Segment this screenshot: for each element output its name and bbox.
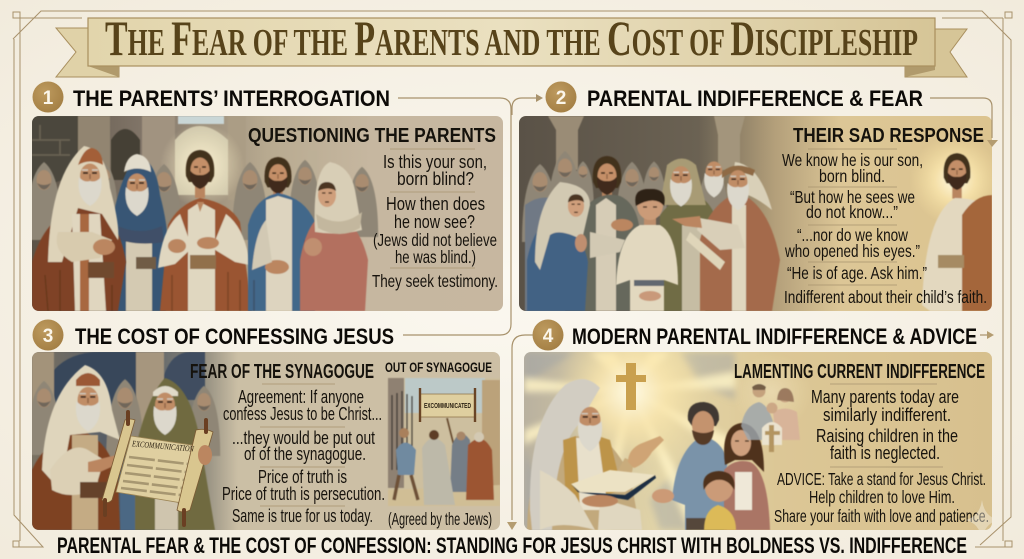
- panel 1 text: Is this your son,: [383, 151, 487, 172]
- panel 2 text: “...nor do we know: [797, 225, 908, 245]
- heading text: PARENTAL INDIFFERENCE & FEAR: [587, 86, 923, 111]
- figure: second elder: [120, 378, 215, 530]
- panel 4 text: faith is neglected.: [830, 442, 940, 463]
- badge 4: [532, 320, 564, 350]
- figure: father: [248, 157, 315, 311]
- panel 4 text: Raising children in the: [816, 425, 958, 446]
- figure: elder in white and brown: [32, 146, 126, 311]
- excommunicated banner: EXCOMMUNICATED: [424, 403, 471, 410]
- panel 1 text: he now see?: [394, 211, 475, 232]
- panel 3: fear of the synagogue: [27, 352, 500, 530]
- left ribbon tail: [56, 28, 119, 77]
- panel 3 text: ...they would be put out: [232, 427, 375, 448]
- figure: mother: [527, 182, 590, 311]
- badge 1: 1: [43, 88, 54, 109]
- panel 2 text: do not know...”: [806, 202, 898, 222]
- figure: father: [582, 156, 640, 311]
- panel 1 text: he was blind.): [395, 247, 476, 267]
- background crowd: [26, 160, 378, 242]
- panel 3 text: Price of truth is persecution.: [222, 483, 385, 504]
- panel 2 text: We know he is our son,: [782, 150, 923, 170]
- section 3 heading: [32, 320, 394, 350]
- agreed by the Jews caption: (Agreed by the Jews): [388, 509, 492, 529]
- stone columns: [548, 116, 745, 170]
- panel 1 text: (Jews did not believe: [373, 230, 497, 250]
- connector lines and arrows: [398, 94, 998, 530]
- stone arches: [32, 352, 206, 425]
- golden light rays and glow: [524, 352, 738, 530]
- panel 1 text: [248, 125, 498, 291]
- badge 4: 4: [543, 326, 554, 347]
- figure: child: [703, 471, 736, 530]
- figure: elder with book: [527, 379, 664, 530]
- badge 1: [32, 82, 64, 112]
- panel 4 text: Help children to love Him.: [809, 487, 955, 507]
- panel 1 text: QUESTIONING THE PARENTS: [248, 125, 496, 147]
- panel 4 text: [734, 361, 989, 526]
- icon: open book: [571, 470, 656, 507]
- small family with cross: [740, 369, 800, 452]
- figure: Jesus: [158, 150, 252, 311]
- figure: lead elder: [32, 365, 125, 530]
- figure: mother: [300, 162, 368, 311]
- background crowd: [522, 151, 729, 311]
- title panel: [88, 18, 935, 66]
- panel 2 text: THEIR SAD RESPONSE: [793, 125, 984, 147]
- background crowd: [27, 379, 220, 461]
- panel 2 text: who opened his eyes.”: [784, 241, 920, 261]
- icon: golden cross: [616, 363, 646, 410]
- excommunicated banner: [420, 388, 475, 422]
- title text: THE FEAR OF THE PARENTS AND THE COST OF DISCIPLESHIP: [105, 10, 918, 66]
- panel 3 text: of of the synagogue.: [244, 443, 366, 464]
- section 2 heading: [546, 82, 923, 112]
- heading text: THE PARENTS’ INTERROGATION: [73, 86, 390, 111]
- panel 3 text: [190, 361, 385, 526]
- figure: pointing elder with scroll: [672, 162, 780, 311]
- badge 3: [32, 320, 64, 350]
- figure: father: [652, 402, 727, 530]
- panel 3 text: FEAR OF THE SYNAGOGUE: [190, 361, 374, 383]
- figure: elder in blue: [106, 154, 168, 311]
- panel 3 text: Price of truth is: [258, 466, 347, 487]
- panel 4 text: Many parents today are: [811, 386, 959, 407]
- scene: cast out of synagogue: [388, 378, 500, 506]
- panel 2 text: [782, 125, 987, 307]
- panel 3 text: Agreement: If anyone: [238, 386, 364, 407]
- courtyard arches: [32, 116, 239, 201]
- panel 2: their sad response: [519, 116, 1000, 311]
- panel 1 text: They seek testimony.: [372, 271, 498, 291]
- heading text: THE COST OF CONFESSING JESUS: [75, 324, 394, 349]
- panel 1 text: How then does: [386, 193, 485, 214]
- figure: boy: [616, 189, 678, 311]
- panel 4 text: similarly indifferent.: [823, 404, 951, 425]
- section 4 heading: [532, 320, 977, 350]
- title banner: [56, 10, 967, 77]
- panel 2 text: “He is of age. Ask him.”: [787, 263, 927, 283]
- panel 3 text: Same is true for us today.: [232, 505, 373, 526]
- figure: mother: [724, 423, 770, 530]
- panel 1 text: born blind?: [397, 168, 474, 189]
- scroll heading: EXCOMMUNICATION: [131, 438, 195, 454]
- right ribbon tail: [905, 29, 967, 77]
- panel 4: lamenting current indifference: [524, 352, 992, 530]
- out of synagogue label: OUT OF SYNAGOGUE: [385, 359, 492, 375]
- badge 2: 2: [556, 88, 566, 109]
- section 1 heading: [32, 82, 390, 112]
- figure: Jesus with halo: [919, 144, 992, 311]
- panel 2 text: born blind.: [819, 166, 885, 186]
- excommunication scroll: [102, 412, 213, 525]
- badge 3: 3: [43, 326, 53, 347]
- panel 2 text: “But how he sees we: [790, 187, 915, 207]
- panel 3 text: confess Jesus to be Christ...: [223, 403, 382, 424]
- panel 1: questioning the parents: [26, 116, 503, 311]
- badge 2: [546, 82, 576, 112]
- watermark sparkle: [966, 500, 998, 540]
